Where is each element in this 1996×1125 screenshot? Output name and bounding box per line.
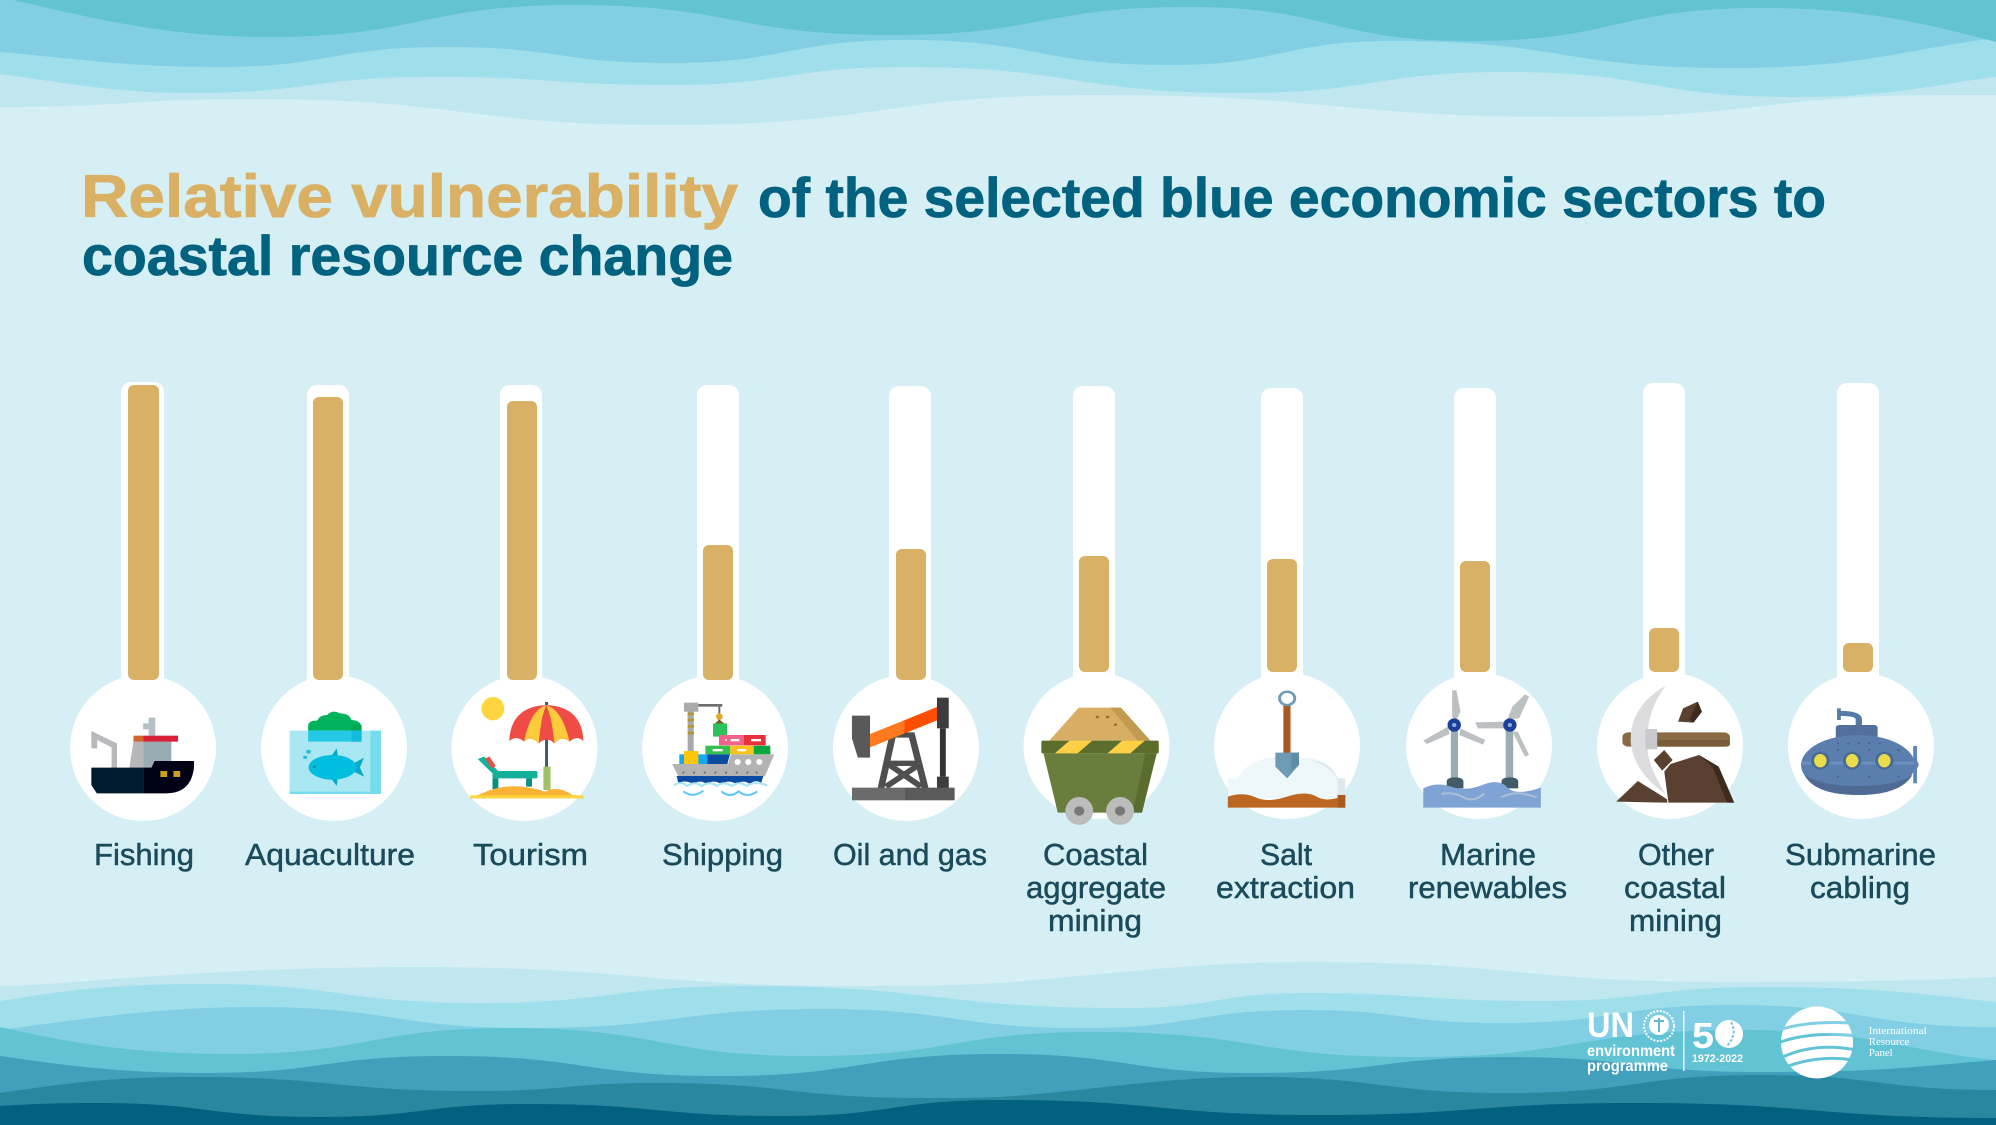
label: Fishing: Fishing: [94, 837, 194, 872]
icon: wind turbines: [1423, 690, 1541, 808]
column: Shipping: [642, 385, 788, 872]
label: Salt extraction: extraction: [1216, 870, 1355, 905]
column: Aquaculture: [245, 385, 415, 872]
icon: oil pump: [852, 698, 955, 800]
label: Shipping: Shipping: [662, 837, 783, 872]
label: Tourism: Tourism: [473, 837, 588, 872]
column: Fishing: [70, 382, 216, 872]
label: Coastal aggregate mining: [1026, 837, 1166, 938]
label: Other coastal mining: [1624, 837, 1726, 938]
label: Other coastal mining: coastal: [1624, 870, 1726, 905]
label: Other coastal mining: mining: [1629, 903, 1722, 938]
logo: UN environment programme 50 years: 5: [1692, 1015, 1714, 1056]
label: Oil and gas: Oil and gas: [833, 837, 987, 872]
label: Marine renewables: Marine: [1440, 837, 1536, 872]
logo: International Resource Panel: International: [1869, 1025, 1927, 1037]
label: Salt extraction: Salt: [1260, 837, 1312, 872]
label: Submarine cabling: cabling: [1810, 870, 1910, 905]
label: Salt extraction: [1216, 837, 1355, 905]
label: Aquaculture: Aquaculture: [245, 837, 415, 872]
column: Tourism: [452, 385, 598, 872]
logo: UN environment programme 50 years: [1587, 1006, 1743, 1075]
label: Coastal aggregate mining: aggregate: [1026, 870, 1166, 905]
title: Relative vulnerability: [81, 163, 739, 230]
column: Oil and gas: [833, 386, 987, 872]
icon: submarine: [1801, 708, 1919, 795]
icon: mine cart: [1041, 708, 1159, 825]
logo: International Resource Panel: Panel: [1869, 1047, 1893, 1059]
logo: International Resource Panel: [1781, 1006, 1927, 1078]
label: Marine renewables: [1408, 837, 1567, 905]
column: Coastal aggregate mining: [1024, 386, 1170, 938]
column: Submarine cabling: [1785, 383, 1936, 905]
logo: UN environment programme 50 years: environment: [1587, 1043, 1676, 1060]
column: Salt extraction: [1214, 388, 1360, 905]
logo: International Resource Panel: Resource: [1869, 1036, 1909, 1048]
title: of the selected blue economic sectors to: [758, 166, 1826, 229]
label: Submarine cabling: [1785, 837, 1936, 905]
column: Marine renewables: [1406, 388, 1567, 905]
logo: UN environment programme 50 years: programme: [1587, 1058, 1668, 1075]
title: coastal resource change: [82, 224, 733, 287]
bottom waves: [0, 962, 1996, 1125]
icon: salt and shovel: [1228, 692, 1345, 808]
logo: UN environment programme 50 years: 1972-2022: [1692, 1053, 1743, 1065]
label: Coastal aggregate mining: Coastal: [1043, 837, 1148, 872]
icon: fishing boat: [91, 718, 194, 793]
label: Coastal aggregate mining: mining: [1048, 903, 1142, 938]
title: [81, 163, 1826, 287]
top waves: [0, 0, 1996, 125]
icon: fish tank: [290, 712, 381, 794]
label: Other coastal mining: Other: [1638, 837, 1714, 872]
icon: beach umbrella: [470, 697, 583, 798]
label: Submarine cabling: Submarine: [1785, 837, 1936, 872]
column: Other coastal mining: [1597, 383, 1743, 938]
label: Marine renewables: renewables: [1408, 870, 1567, 905]
icon: container ship: [672, 703, 774, 795]
icon: pickaxe and rocks: [1616, 686, 1734, 803]
logo: UN environment programme 50 years: UN: [1587, 1006, 1634, 1045]
